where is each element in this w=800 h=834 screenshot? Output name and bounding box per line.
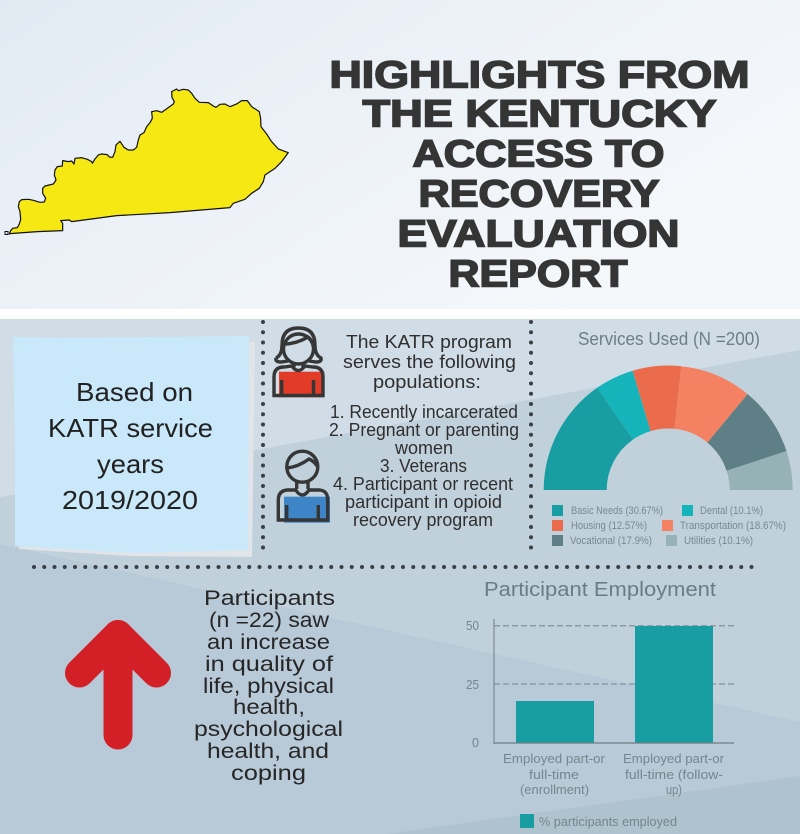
icon: Kentucky state map — [5, 89, 288, 235]
population text: populations: — [373, 372, 481, 392]
bar chart legend: % participants employed — [539, 814, 677, 829]
bar chart: participant employment: full-time (follow- — [625, 767, 723, 782]
population text: recovery program — [353, 510, 493, 530]
chart title: participant employment: Participant Employment — [484, 579, 716, 601]
text: participants outcome: psychological — [194, 718, 343, 741]
note card: service years: Based on — [76, 377, 193, 407]
bar: enrollment — [516, 701, 594, 743]
text: participants outcome: life, physical — [203, 675, 334, 698]
text: participants outcome: health, and — [207, 740, 329, 763]
icon: woman — [274, 328, 324, 397]
population text: 4. Participant or recent — [333, 474, 513, 494]
bar chart: participant employment — [466, 618, 734, 797]
title — [330, 54, 750, 296]
donut legend: Transportation (18.67%) — [680, 520, 786, 532]
text: participants outcome: health, — [233, 696, 305, 719]
bar chart: participant employment: 0 — [472, 735, 479, 750]
title: RECOVERY — [418, 174, 660, 216]
text: participants outcome: coping — [231, 762, 306, 785]
title: HIGHLIGHTS FROM — [330, 54, 750, 96]
text: participants outcome — [194, 587, 343, 785]
title: ACCESS TO — [412, 134, 664, 176]
donut legend: Dental (10.1%) — [700, 505, 763, 517]
chart title: services used: Services Used (N =200) — [578, 329, 760, 349]
segment: transportation — [675, 366, 748, 443]
segment: vocational — [707, 394, 786, 471]
arrow: increase — [80, 634, 156, 735]
population text: 1. Recently incarcerated — [330, 402, 518, 422]
population text: women — [394, 438, 453, 458]
bar chart: participant employment: (enrollment) — [520, 782, 589, 797]
population text: 2. Pregnant or parenting — [329, 420, 519, 440]
bar chart: participant employment: Employed part-or — [623, 751, 725, 766]
population text: 3. Veterans — [380, 456, 467, 476]
text: participants outcome: in quality of — [205, 653, 333, 676]
note card: service years: 2019/2020 — [62, 485, 198, 515]
title: THE KENTUCKY — [362, 94, 716, 136]
title: REPORT — [448, 254, 628, 296]
donut chart: services used — [544, 366, 793, 490]
bar chart: participant employment: up) — [666, 782, 682, 797]
segment: utilities — [727, 451, 793, 490]
lower panel background — [0, 319, 800, 834]
population text: participant in opioid — [345, 492, 502, 512]
segment: basic needs — [544, 388, 633, 490]
header background — [0, 0, 800, 309]
donut legend — [552, 505, 786, 547]
segment: dental — [597, 371, 651, 440]
bar: follow-up — [635, 626, 713, 743]
donut legend: Utilities (10.1%) — [684, 535, 753, 547]
donut legend: Vocational (17.9%) — [570, 535, 652, 547]
population text: serves the following — [343, 352, 516, 372]
note card: service years: KATR service — [48, 413, 213, 443]
text: participants outcome: an increase — [207, 631, 330, 654]
text: participants outcome: Participants — [204, 587, 335, 610]
segment: housing — [633, 366, 681, 431]
bar chart: participant employment: 25 — [466, 677, 479, 692]
bar chart: participant employment: Employed part-or — [503, 751, 606, 766]
text: participants outcome: (n =22) saw — [209, 609, 330, 632]
icon: man — [278, 451, 330, 523]
note card: service years — [13, 336, 255, 557]
donut legend: Housing (12.57%) — [571, 520, 647, 532]
bar chart: participant employment: 50 — [466, 618, 479, 633]
population text — [329, 332, 519, 530]
bar chart: participant employment: full-time — [529, 767, 579, 782]
donut legend: Basic Needs (30.67%) — [571, 505, 663, 517]
title: EVALUATION — [398, 214, 680, 256]
population text: The KATR program — [346, 332, 512, 352]
note card: service years: years — [97, 449, 164, 479]
